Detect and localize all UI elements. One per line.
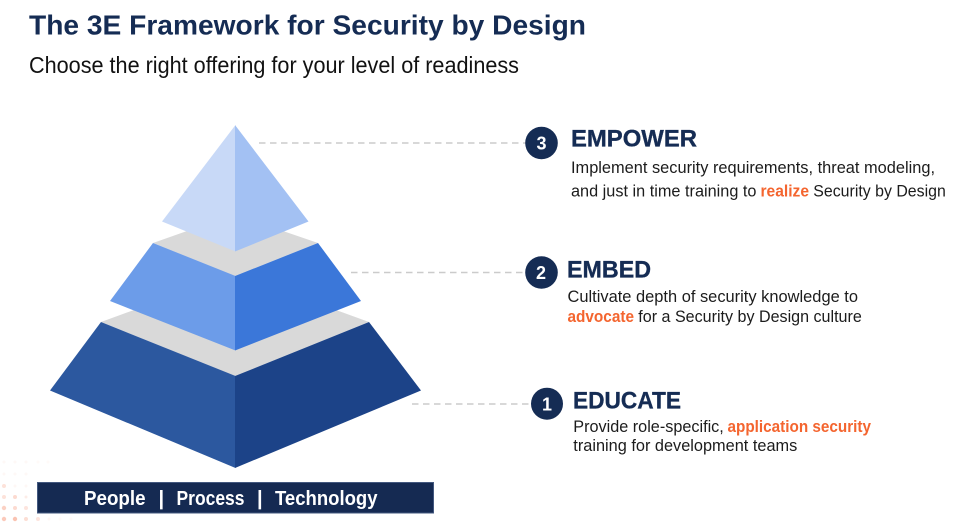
subtitle: Choose the right offering for your level of readiness	[29, 52, 519, 78]
description: for a Security by Design culture	[638, 308, 862, 326]
foundation bar	[38, 482, 434, 513]
description: realize	[760, 182, 809, 200]
pyramid	[50, 125, 533, 468]
description: Implement security requirements, threat modeling,	[571, 159, 935, 177]
badge 2: 2	[536, 263, 546, 283]
badge 3: 3	[536, 134, 547, 154]
badge 2	[525, 256, 558, 289]
grey ledge upper	[153, 231, 318, 276]
description: and just in time training to	[571, 182, 756, 200]
description: advocate	[568, 308, 634, 326]
bar label: Technology	[275, 488, 378, 510]
bar label: People	[84, 488, 146, 510]
tier 1 base: educate	[50, 322, 421, 468]
badge 1	[531, 388, 563, 420]
tier 2 middle: embed	[110, 243, 361, 350]
title: The 3E Framework for Security by Design	[29, 10, 586, 40]
description	[573, 418, 872, 455]
connector dashes	[259, 143, 533, 404]
bar label: Process	[176, 488, 244, 510]
description: Cultivate depth of security knowledge to	[568, 288, 858, 306]
item 1: educate	[531, 388, 872, 455]
description	[568, 288, 862, 326]
tier 3 top: empower	[162, 125, 308, 252]
item 2: embed	[525, 256, 862, 326]
description	[571, 159, 946, 200]
description: Security by Design	[813, 182, 946, 200]
grey ledge lower	[101, 310, 369, 376]
heading: EMBED	[567, 256, 651, 284]
heading: EMPOWER	[571, 126, 697, 152]
description: training for development teams	[573, 437, 797, 455]
item 3: empower	[525, 126, 946, 200]
bar label: |	[257, 488, 263, 510]
description: Provide role-specific,	[573, 418, 724, 436]
description: application security	[728, 418, 872, 436]
heading: EDUCATE	[573, 388, 681, 414]
badge 1: 1	[542, 394, 552, 414]
bar label	[84, 488, 378, 510]
badge 3	[525, 127, 558, 159]
bar label: |	[158, 488, 164, 510]
